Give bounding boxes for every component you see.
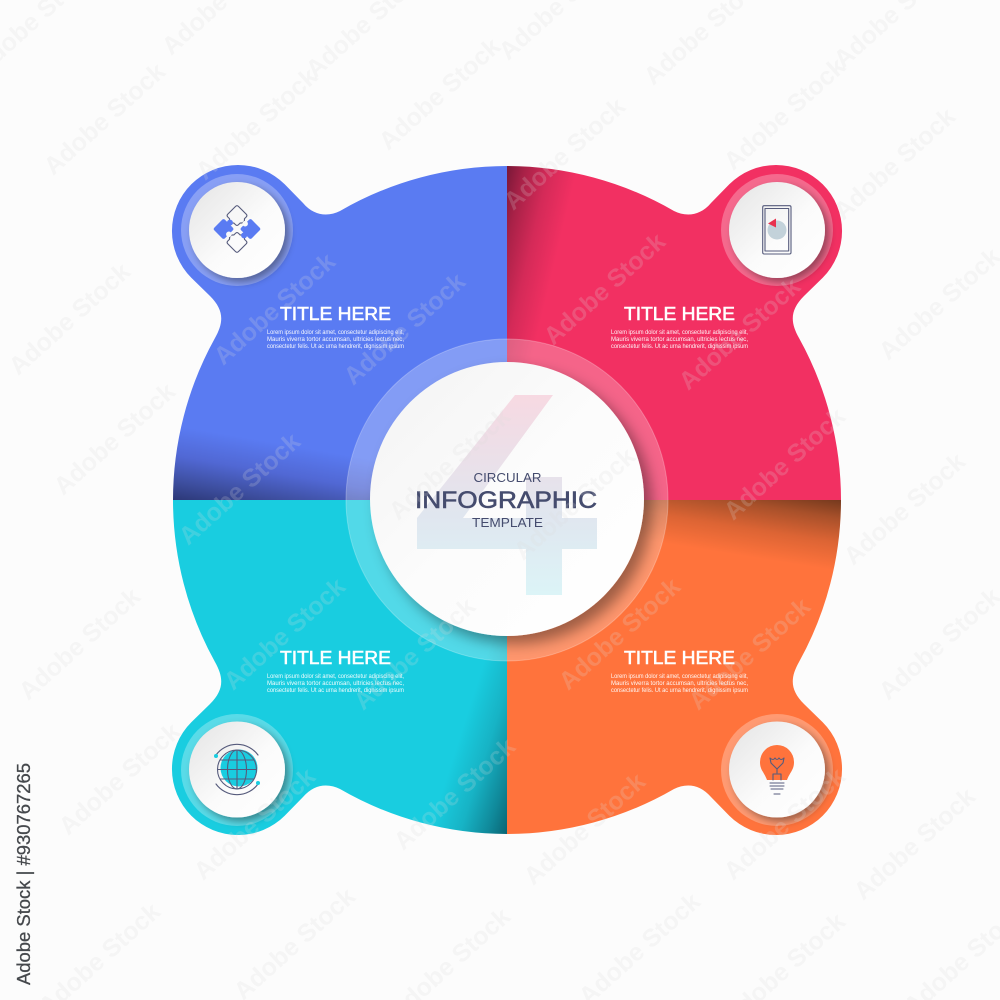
text block: bottom-right: TITLE HERE [624,648,735,668]
watermark: Adobe Stock [339,267,471,391]
text block: top-right: Lorem ipsum dolor sit amet, consectetur adipiscing elit, [611,329,748,336]
watermark: Adobe Stock [54,717,186,841]
watermark: Adobe Stock [674,272,806,396]
watermark: Adobe Stock [14,582,146,706]
watermark: Adobe Stock [719,52,851,176]
watermark: Adobe Stock [829,102,961,226]
watermark: Adobe Stock [519,767,651,891]
watermark: Adobe Stock [191,62,323,186]
watermark: Adobe Stock [384,402,516,526]
icon badge: light bulb [721,714,833,826]
text block: bottom-left: Lorem ipsum dolor sit amet, consectetur adipiscing elit, [267,673,404,680]
text block: bottom-right: Mauris viverra tortor accumsan, ultricies lectus nec, [611,680,748,687]
segment: teal bottom-left [172,500,507,835]
centre white disc [370,362,644,636]
watermark: Adobe Stock [509,442,641,566]
centre translucent ring [346,339,668,661]
centre heading: INFOGRAPHIC [415,487,597,514]
watermark: Adobe Stock [219,572,351,696]
watermark: Adobe Stock [539,227,671,351]
text block: bottom-left: Mauris viverra tortor accumsan, ultricies lectus nec, [267,680,404,687]
watermark: Adobe Stock [209,247,341,371]
text block: top-left [267,304,404,350]
watermark: Adobe Stock [719,762,851,886]
text block: top-left: TITLE HERE [280,304,391,324]
centre heading: TEMPLATE [472,515,543,530]
watermark: Adobe Stock [49,377,181,501]
centre heading [415,471,597,530]
text block: bottom-left: consectetur felis. Ut ac urna hendrerit, dignissim ipsum [267,687,404,694]
watermark: Adobe Stock [39,57,171,181]
icon badge: phone with pie chart [721,174,833,286]
segment: pink top-right [507,165,842,500]
watermark: Adobe Stock [374,32,506,156]
icon badge: puzzle [181,174,293,286]
stock id label: Adobe Stock | #930767265 [14,763,34,985]
text block: bottom-right: Lorem ipsum dolor sit amet, consectetur adipiscing elit, [611,673,748,680]
text block: top-left: Lorem ipsum dolor sit amet, consectetur adipiscing elit, [267,329,404,336]
text block: bottom-right [611,648,748,694]
watermark: Adobe Stock [389,732,521,856]
text block: top-right [611,304,748,350]
watermark: Adobe Stock [4,257,136,381]
text block: top-left: consectetur felis. Ut ac urna hendrerit, dignissim ipsum [267,343,404,350]
segment: orange bottom-right [507,500,842,835]
text block: top-right: TITLE HERE [624,304,735,324]
text block: top-right: Mauris viverra tortor accumsan, ultricies lectus nec, [611,336,748,343]
text block: top-right: consectetur felis. Ut ac urna hendrerit, dignissim ipsum [611,343,748,350]
text block: top-left: Mauris viverra tortor accumsan, ultricies lectus nec, [267,336,404,343]
watermark: Adobe Stock [849,782,981,906]
centre heading: CIRCULAR [474,471,542,485]
icon badge: globe [181,714,293,826]
big numeral 4 [417,395,597,595]
text block: bottom-left: TITLE HERE [280,648,391,668]
watermark: Adobe Stock [554,572,686,696]
watermark: Adobe Stock [719,402,851,526]
watermark: Adobe Stock [684,592,816,716]
text block: bottom-left [267,648,404,694]
segment: blue top-left [172,165,507,500]
watermark: Adobe Stock [839,447,971,571]
watermark: Adobe Stock [499,92,631,216]
watermark: Adobe Stock [349,592,481,716]
watermark: Adobe Stock [189,762,321,886]
text block: bottom-right: consectetur felis. Ut ac urna hendrerit, dignissim ipsum [611,687,748,694]
watermark: Adobe Stock [174,427,306,551]
